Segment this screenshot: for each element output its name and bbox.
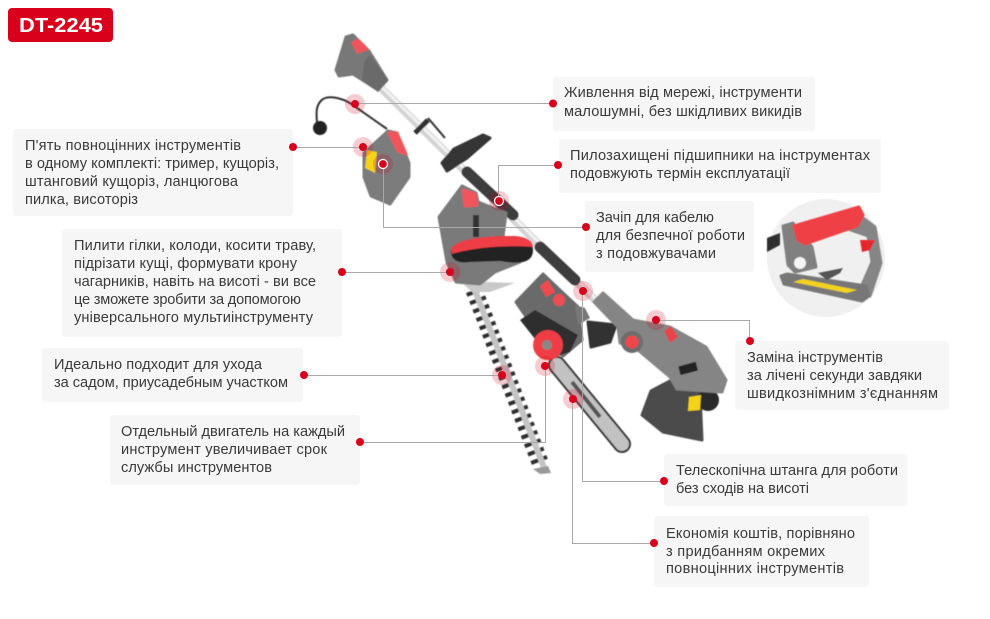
callout: uses: чагарників, навіть на висоті - ви все [74, 274, 316, 290]
leader: savings [563, 389, 658, 547]
callout: savings: з придбанням окремих [666, 544, 826, 560]
callout: quick change: швидкознімним з'єднанням [747, 386, 938, 402]
hedge trimmer body [439, 186, 533, 284]
leader: bearings [489, 161, 562, 211]
callout: quick change [735, 341, 949, 410]
callout: dust-proof bearings: подовжують термін експлуатації [570, 166, 790, 182]
callout: cable hook: Зачіп для кабелю [596, 210, 714, 226]
side grip [442, 135, 490, 171]
product illustration: multi-tool kit [313, 35, 726, 474]
top handle [336, 35, 388, 92]
callout: garden care [42, 348, 303, 402]
hedge trimmer blade [460, 281, 551, 474]
callout: mains power [553, 77, 815, 131]
callout: dust-proof bearings [559, 139, 881, 193]
shoulder strap clamp [415, 118, 445, 138]
leader: uses [338, 262, 460, 282]
leader: quick change [646, 310, 754, 345]
callout: garden care: за садом, приусадебным участком [54, 375, 288, 391]
callout: savings: Економія коштів, порівняно [666, 526, 855, 542]
callout: mains power: малошумні, без шкідливих викидів [564, 104, 802, 120]
callout: telescopic pole [664, 454, 907, 506]
callout: separate motor: службы инструментов [121, 460, 272, 476]
callout: uses: підрізати кущі, формувати крону [74, 256, 298, 272]
leader: cable hook [373, 154, 590, 231]
model badge [8, 8, 113, 42]
callout: dust-proof bearings: Пилозахищені підшипники на інструментах [570, 148, 871, 164]
callout: mains power: Живлення від мережі, інструменти [564, 85, 802, 101]
callout: garden care: Идеально подходит для ухода [54, 357, 263, 373]
callout: five tools [13, 129, 293, 216]
callout: uses: це зможете зробити за допомогою [74, 292, 301, 308]
callout: telescopic pole: без сходів на висоті [676, 481, 809, 497]
foam grip lower [540, 247, 575, 280]
inset: cable hook detail [767, 199, 885, 317]
callout: uses: Пилити гілки, колоди, косити траву, [74, 238, 316, 254]
leader lines and markers [289, 94, 754, 547]
callout: separate motor: инструмент увеличивает срок [121, 442, 328, 458]
leader: mains power [345, 94, 557, 114]
string trimmer head [594, 293, 726, 411]
callout: quick change: Заміна інструментів [747, 350, 883, 366]
callout: quick change: за лічені секунди завдяки [747, 368, 922, 384]
trimmer guard [642, 381, 719, 440]
callout: cable hook: для безпечної роботи [596, 228, 745, 244]
foam grip upper [467, 172, 513, 215]
telescopic pole [378, 83, 595, 300]
leader: telescopic pole [573, 281, 668, 485]
chainsaw bar [557, 365, 622, 444]
leader: five tools [289, 137, 373, 157]
callout: cable hook: з подовжувачами [596, 246, 716, 262]
callout: five tools: штанговий кущоріз, ланцюгова [25, 174, 239, 190]
callout: savings [654, 516, 869, 587]
callout: separate motor: Отдельный двигатель на каждый [121, 424, 345, 440]
callout: five tools: пилка, висоторіз [25, 192, 138, 208]
callout: separate motor [110, 415, 360, 485]
callout: cable hook [585, 201, 754, 272]
callout: telescopic pole: Телескопічна штанга для роботи [676, 463, 898, 479]
callout: uses [62, 229, 342, 337]
callout: five tools: П'ять повноцінних інструментів [25, 138, 241, 154]
power cord and plug [313, 97, 387, 135]
connecting arm [588, 322, 616, 347]
leader: garden care [300, 365, 512, 385]
callout: uses: універсального мультиінструменту [74, 310, 314, 326]
leader: separate motor [356, 356, 555, 446]
model badge: DT-2245 [19, 15, 103, 37]
callout: savings: повноцінних інструментів [666, 561, 844, 577]
power unit [364, 131, 409, 204]
chainsaw body [516, 274, 590, 360]
callout: five tools: в одному комплекті: тример, кущоріз, [25, 156, 279, 172]
